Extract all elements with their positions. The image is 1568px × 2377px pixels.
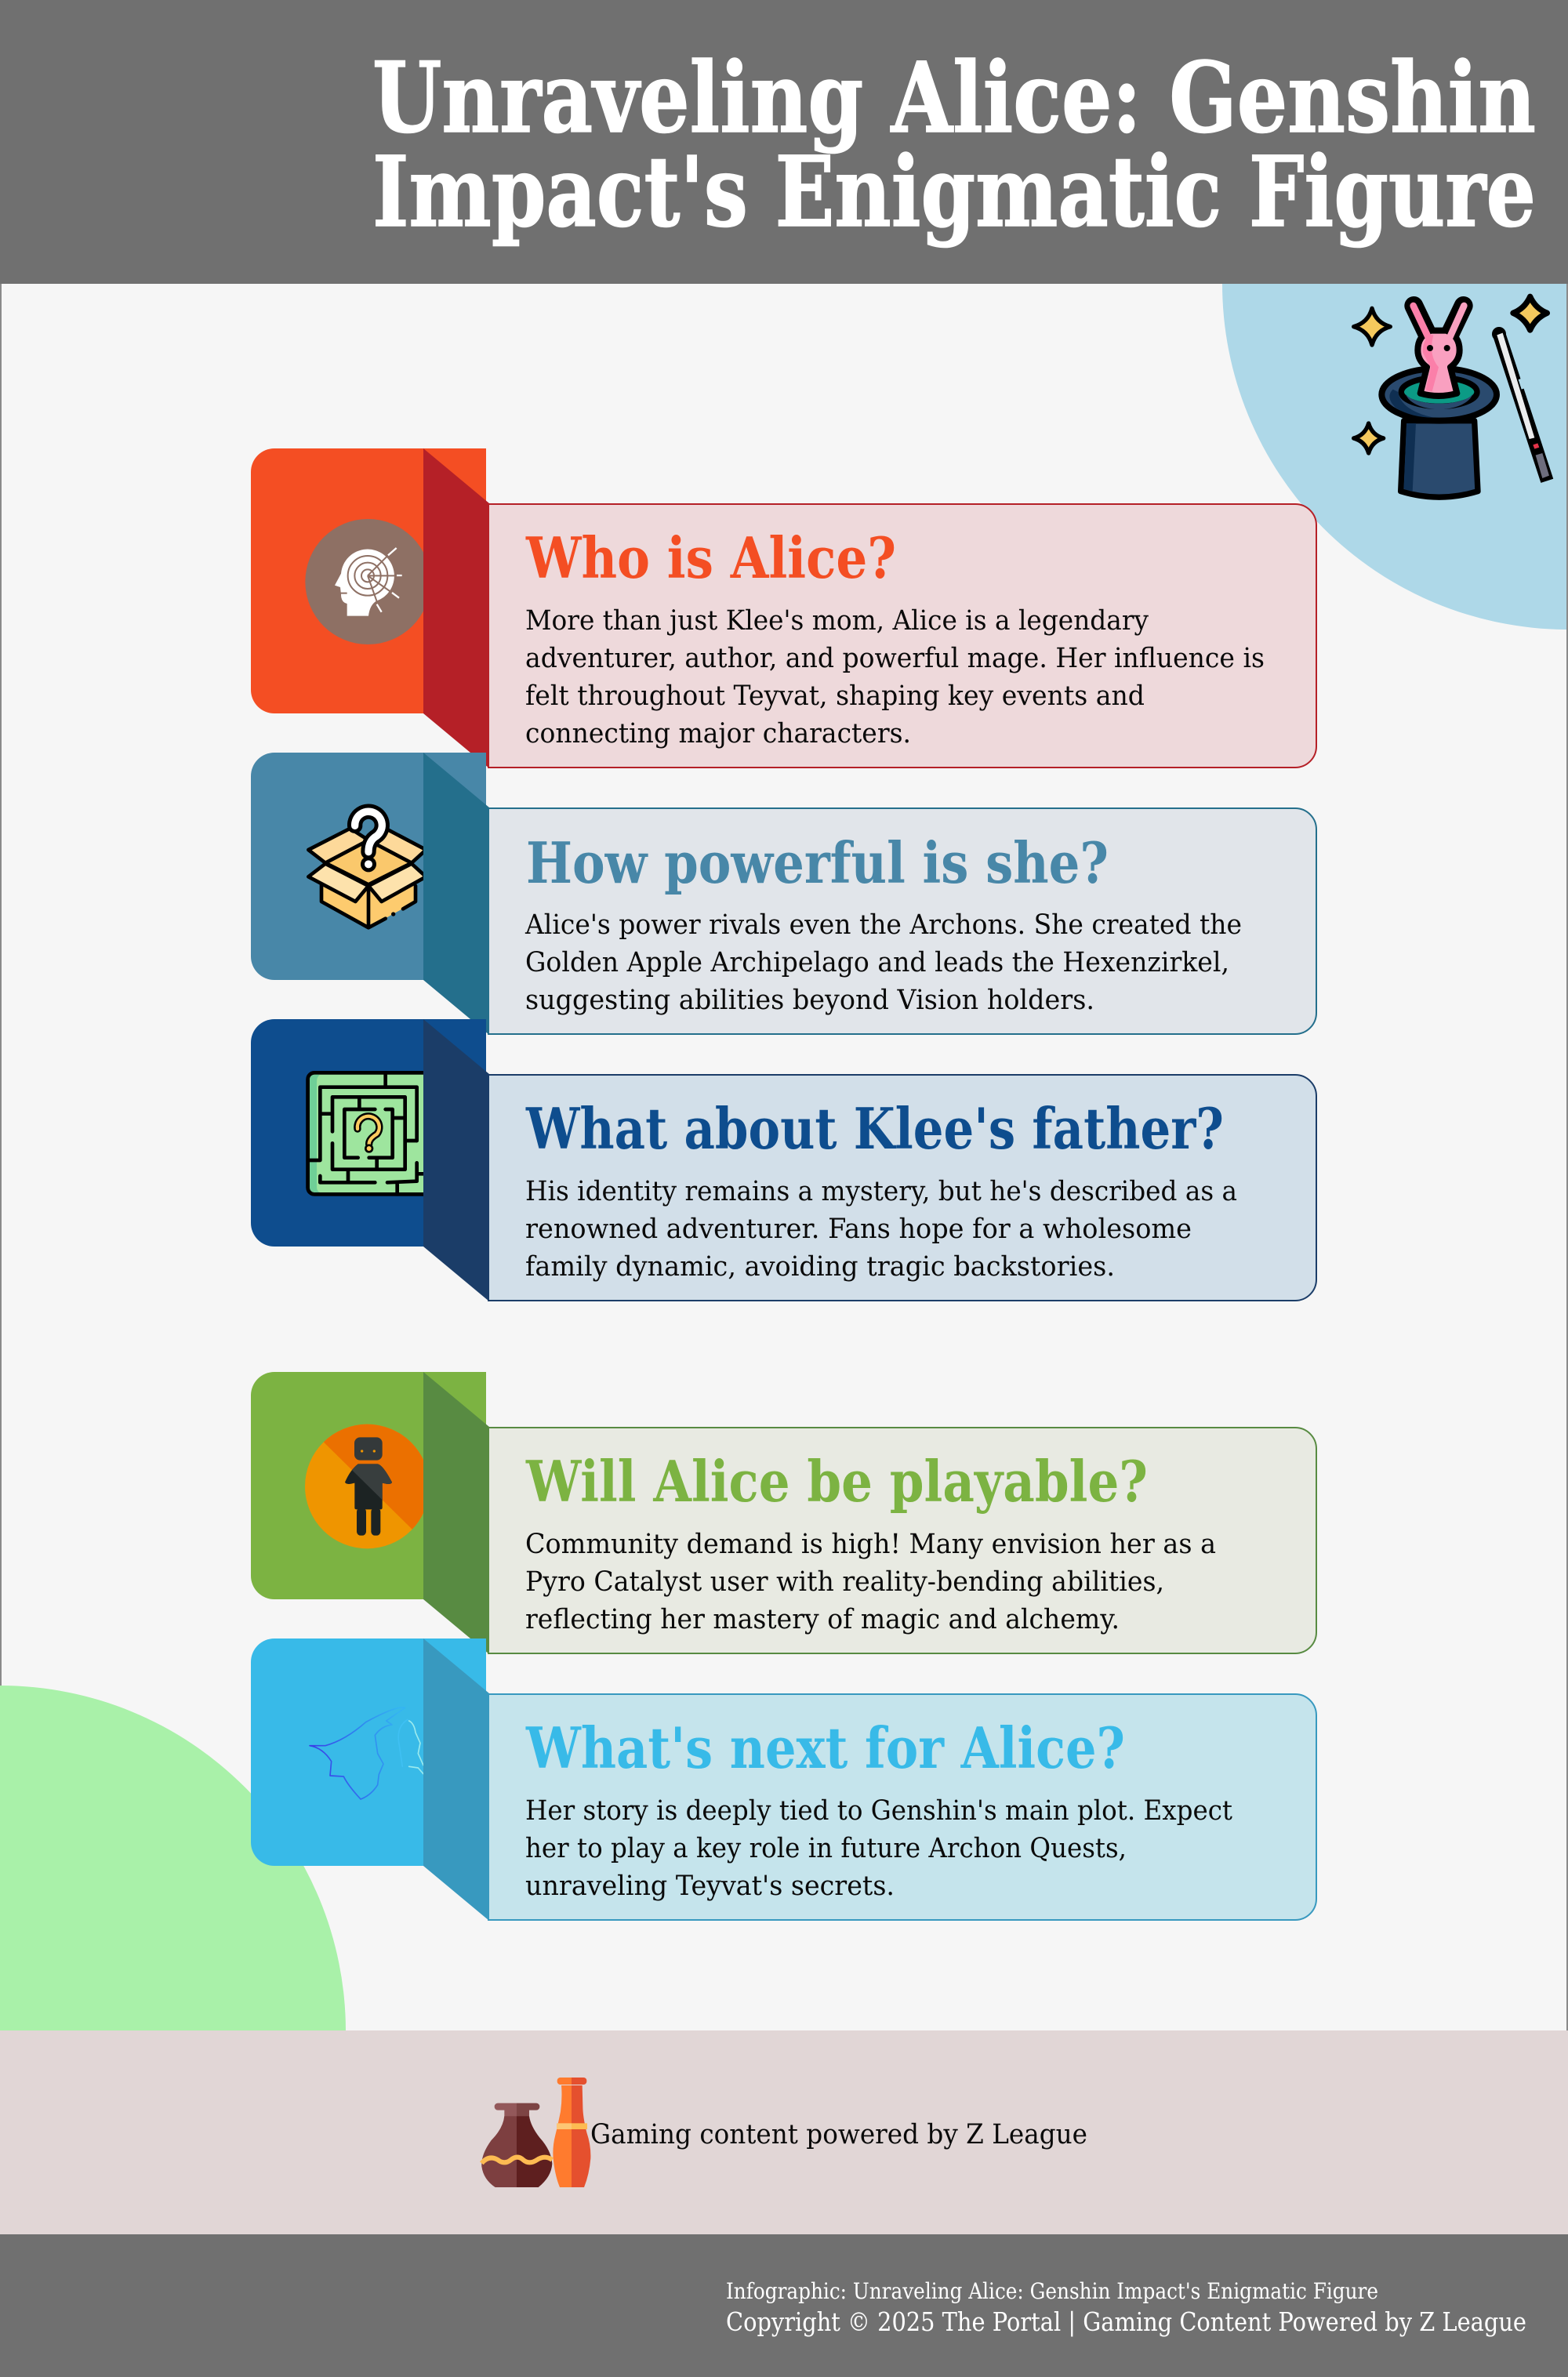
panel: What's next for Alice? [251, 1638, 1316, 1921]
icon tile [251, 1372, 486, 1599]
footer band [0, 2234, 1568, 2377]
text box [488, 1694, 1316, 1920]
sponsor band [0, 2030, 1568, 2234]
decorative circle: top right [1222, 284, 1566, 630]
heading: What about Klee's father? [525, 1095, 1224, 1162]
icon tile [251, 1019, 486, 1247]
header band [0, 0, 1568, 284]
body text [525, 605, 1265, 749]
footer text: Infographic: Unraveling Alice: Genshin Impact's Enigmatic Figure [726, 2278, 1378, 2304]
body text: More than just Klee's mom, Alice is a legendary [525, 605, 1149, 637]
icon: vases [481, 2078, 590, 2187]
fold panel [423, 1372, 489, 1654]
body text: Pyro Catalyst user with reality-bending abilities, [525, 1566, 1164, 1598]
title [372, 42, 1536, 249]
fold panel [423, 1019, 489, 1301]
body text: renowned adventurer. Fans hope for a wholesome [525, 1214, 1192, 1245]
icon: head with target [305, 519, 430, 644]
panel: Who is Alice? [251, 448, 1316, 768]
body text [525, 1529, 1216, 1635]
body text: Alice's power rivals even the Archons. She created the [524, 909, 1242, 941]
text box [488, 504, 1316, 768]
sponsor text: Gaming content powered by Z League [590, 2119, 1087, 2150]
fold panel [423, 753, 489, 1035]
body text: Her story is deeply tied to Genshin's main plot. Expect [525, 1795, 1232, 1827]
body text: unraveling Teyvat's secrets. [525, 1871, 895, 1902]
body text: His identity remains a mystery, but he's described as a [525, 1176, 1237, 1207]
body text: suggesting abilities beyond Vision holders. [525, 985, 1094, 1016]
body text: reflecting her mastery of magic and alchemy. [525, 1604, 1120, 1635]
fold panel [423, 448, 489, 768]
decorative circle: bottom left [0, 1686, 346, 2030]
icon tile [251, 753, 486, 980]
heading: What's next for Alice? [525, 1715, 1125, 1781]
body text [524, 909, 1242, 1016]
heading: How powerful is she? [526, 829, 1109, 896]
icon: mystery box [308, 811, 426, 927]
side frame [0, 284, 1568, 2030]
heading: Who is Alice? [525, 524, 896, 591]
body text: her to play a key role in future Archon Quests, [525, 1833, 1127, 1864]
body text: connecting major characters. [525, 718, 911, 749]
panel: Will Alice be playable? [251, 1372, 1316, 1654]
icon: magic hat with rabbit and wand [1354, 296, 1549, 497]
panel: What about Klee's father? [251, 1019, 1316, 1301]
body text: Community demand is high! Many envision her as a [525, 1529, 1216, 1560]
icon: maze [308, 1072, 434, 1194]
body text: felt throughout Teyvat, shaping key events and [525, 680, 1145, 712]
text box [488, 1428, 1316, 1653]
text box [488, 808, 1316, 1034]
body text: adventurer, author, and powerful mage. Her influence is [525, 643, 1265, 674]
fold panel [423, 1638, 489, 1921]
icon: figure in circle [305, 1424, 423, 1549]
panel: How powerful is she? [251, 753, 1316, 1035]
body text: family dynamic, avoiding tragic backstories. [525, 1251, 1115, 1283]
icon tile [251, 1638, 486, 1866]
text box [488, 1075, 1316, 1301]
footer text [726, 2278, 1526, 2337]
icon tile [251, 448, 486, 713]
heading: Will Alice be playable? [525, 1448, 1148, 1515]
body text: Golden Apple Archipelago and leads the Hexenzirkel, [525, 947, 1229, 978]
icon: wispy silhouette [310, 1707, 423, 1799]
body text [525, 1176, 1237, 1283]
body text [525, 1795, 1232, 1902]
